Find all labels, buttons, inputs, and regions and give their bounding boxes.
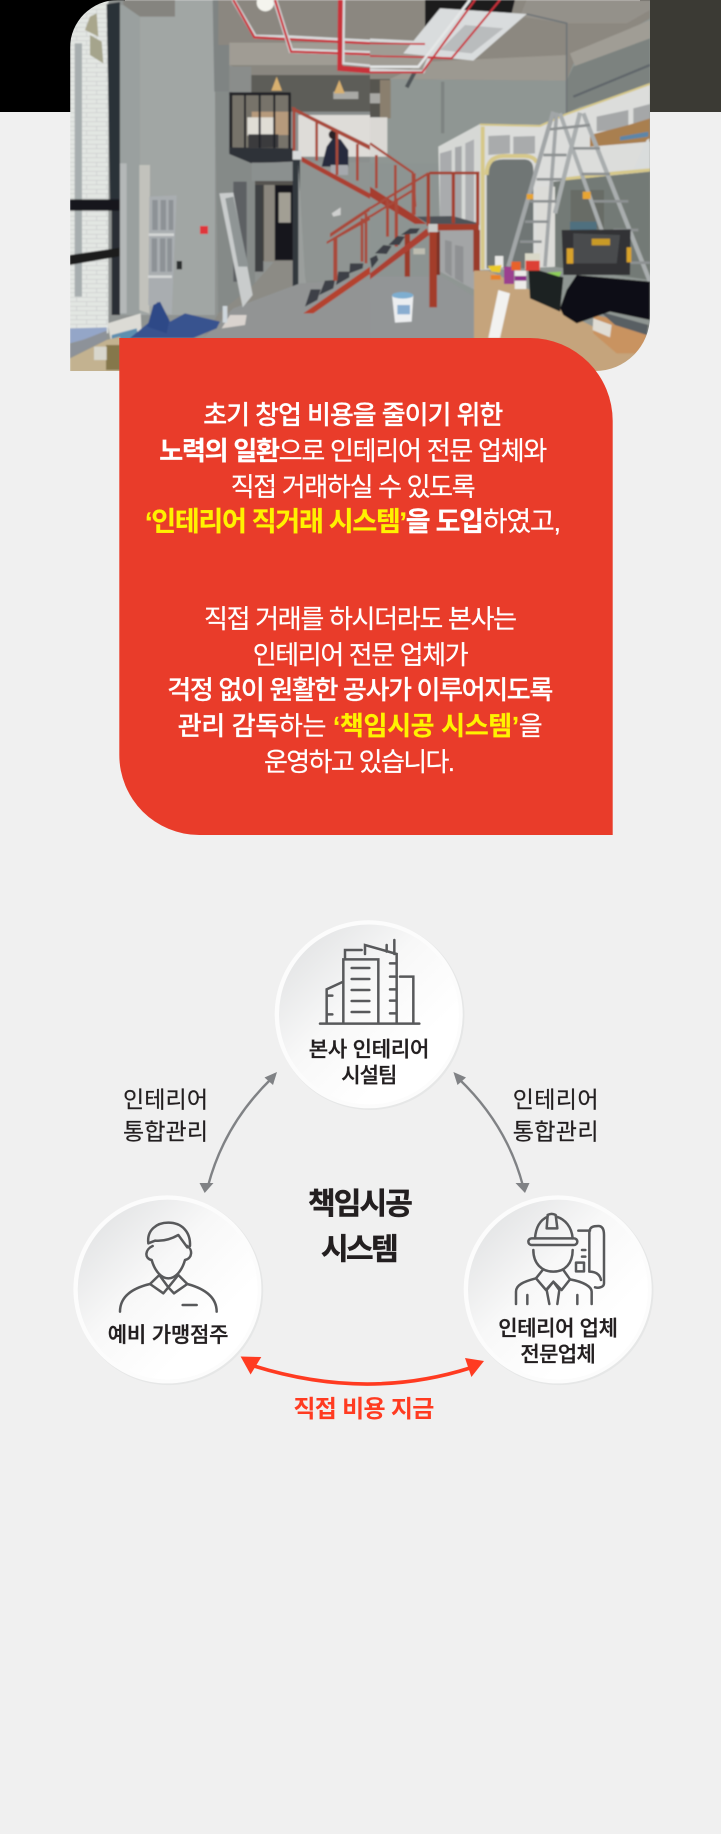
arrow: right two-way management xyxy=(453,1072,530,1193)
intro paragraph two xyxy=(167,604,553,777)
label: integrated management left xyxy=(123,1087,208,1144)
icon: worker with blueprint xyxy=(516,1214,604,1304)
red text panel xyxy=(119,338,613,835)
icon: person xyxy=(120,1223,217,1312)
node: prospective franchisee xyxy=(73,1195,263,1385)
icon: buildings xyxy=(320,940,419,1024)
node: headquarters interior team: 시설팀 xyxy=(341,1065,397,1088)
node: prospective franchisee: 예비 가맹점주 xyxy=(108,1324,228,1347)
node: interior contractor xyxy=(464,1195,654,1385)
intro paragraph two: 걱정 없이 원활한 공사가 이루어지도록 xyxy=(167,675,553,705)
intro paragraph one xyxy=(145,400,561,537)
intro paragraph two: 직접 거래를 하시더라도 본사는 xyxy=(204,604,517,634)
label: integrated management right: 통합관리 xyxy=(513,1118,598,1144)
intro paragraph two: 인테리어 전문 업체가 xyxy=(253,640,469,670)
intro paragraph one: 초기 창업 비용을 줄이기 위한 xyxy=(203,400,503,430)
intro paragraph one: 노력의 일환으로 인테리어 전문 업체와 xyxy=(159,436,547,466)
arrow: direct payment xyxy=(241,1356,484,1384)
node: headquarters interior team: 본사 인테리어 xyxy=(309,1039,429,1062)
intro paragraph two: 관리 감독하는 ‘책임시공 시스템’을 xyxy=(178,711,543,741)
center title: 책임시공 xyxy=(308,1188,413,1221)
node: headquarters interior team xyxy=(275,920,464,1110)
center title xyxy=(308,1188,413,1266)
label: integrated management left: 통합관리 xyxy=(123,1118,208,1144)
label: integrated management right: 인테리어 xyxy=(513,1087,598,1113)
arrow: left two-way management xyxy=(200,1072,277,1193)
label: integrated management left: 인테리어 xyxy=(123,1087,208,1113)
intro paragraph one: ‘인테리어 직거래 시스템’을 도입하였고, xyxy=(145,507,561,537)
label: direct payment: 직접 비용 지금 xyxy=(293,1396,434,1423)
top band left xyxy=(0,0,125,112)
photo: interior under construction xyxy=(70,0,653,375)
intro paragraph one: 직접 거래하실 수 있도록 xyxy=(231,472,476,502)
label: integrated management right xyxy=(513,1087,598,1144)
intro paragraph two: 운영하고 있습니다. xyxy=(264,747,455,777)
node: interior contractor: 인테리어 업체 xyxy=(498,1318,618,1341)
top band right xyxy=(640,0,721,112)
center title: 시스템 xyxy=(321,1234,399,1266)
node: interior contractor: 전문업체 xyxy=(520,1344,596,1366)
